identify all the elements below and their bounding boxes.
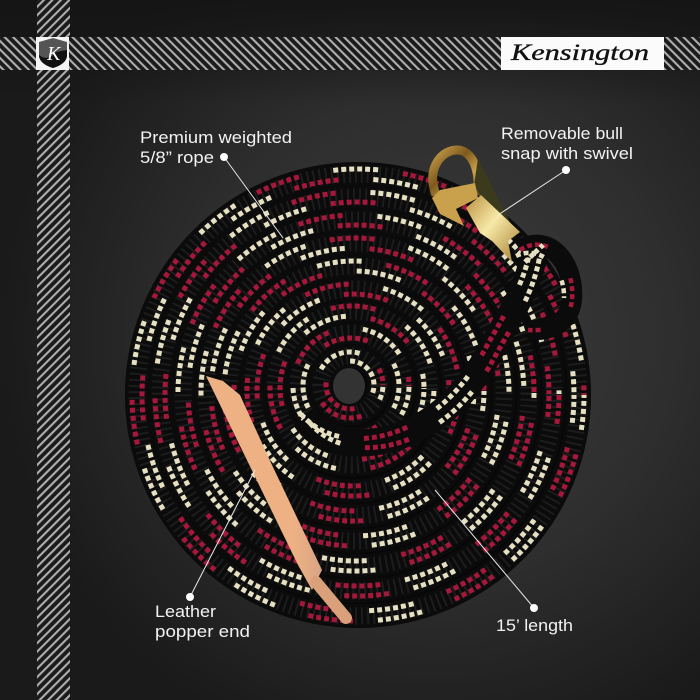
centre hole xyxy=(333,368,365,404)
logo: Kensington: Kensington xyxy=(510,40,649,65)
callout: Removable bull snap: snap with swivel xyxy=(501,145,633,163)
striped band: vertical xyxy=(37,0,70,700)
coil ring 1 (outer) xyxy=(132,169,584,621)
rope loop at the snap xyxy=(516,243,572,330)
coil ring 3 xyxy=(178,215,534,571)
coil ring 7 xyxy=(270,306,434,470)
rope coil xyxy=(125,162,591,628)
rope strand sweeping to the snap xyxy=(301,246,540,448)
gate xyxy=(432,183,478,226)
callout: Leather popper end xyxy=(155,470,255,641)
icon: brass bull snap with swivel xyxy=(432,150,520,262)
eye of the snap xyxy=(433,150,478,195)
coil ring 6 xyxy=(247,284,459,496)
logo: Kensington xyxy=(501,37,664,70)
coil ring 2 xyxy=(155,192,559,596)
callout: 15' length: 15’ length xyxy=(496,617,573,635)
leather popper end xyxy=(206,376,346,618)
dark back band xyxy=(474,158,512,228)
striped band: horizontal xyxy=(0,37,700,70)
icon: K shield badge: K xyxy=(46,43,62,65)
callout: Removable bull snap xyxy=(498,125,633,215)
callout: Leather popper end: Leather xyxy=(155,603,217,621)
coil ring 8 xyxy=(293,328,409,444)
callout: Premium weighted rope: Premium weighted xyxy=(140,129,292,147)
coil ring 9 (inner) xyxy=(317,352,383,418)
coil ring 4 xyxy=(201,238,509,546)
body plate xyxy=(466,195,520,262)
callout: Premium weighted rope xyxy=(140,129,292,238)
callout: Removable bull snap: Removable bull xyxy=(501,125,623,143)
coil ring 5 xyxy=(224,261,484,521)
callout: Leather popper end: popper end xyxy=(155,623,250,641)
callout: Premium weighted rope: 5/8” rope xyxy=(140,149,214,167)
callout: 15' length xyxy=(435,490,573,635)
icon: K shield badge xyxy=(36,37,69,70)
